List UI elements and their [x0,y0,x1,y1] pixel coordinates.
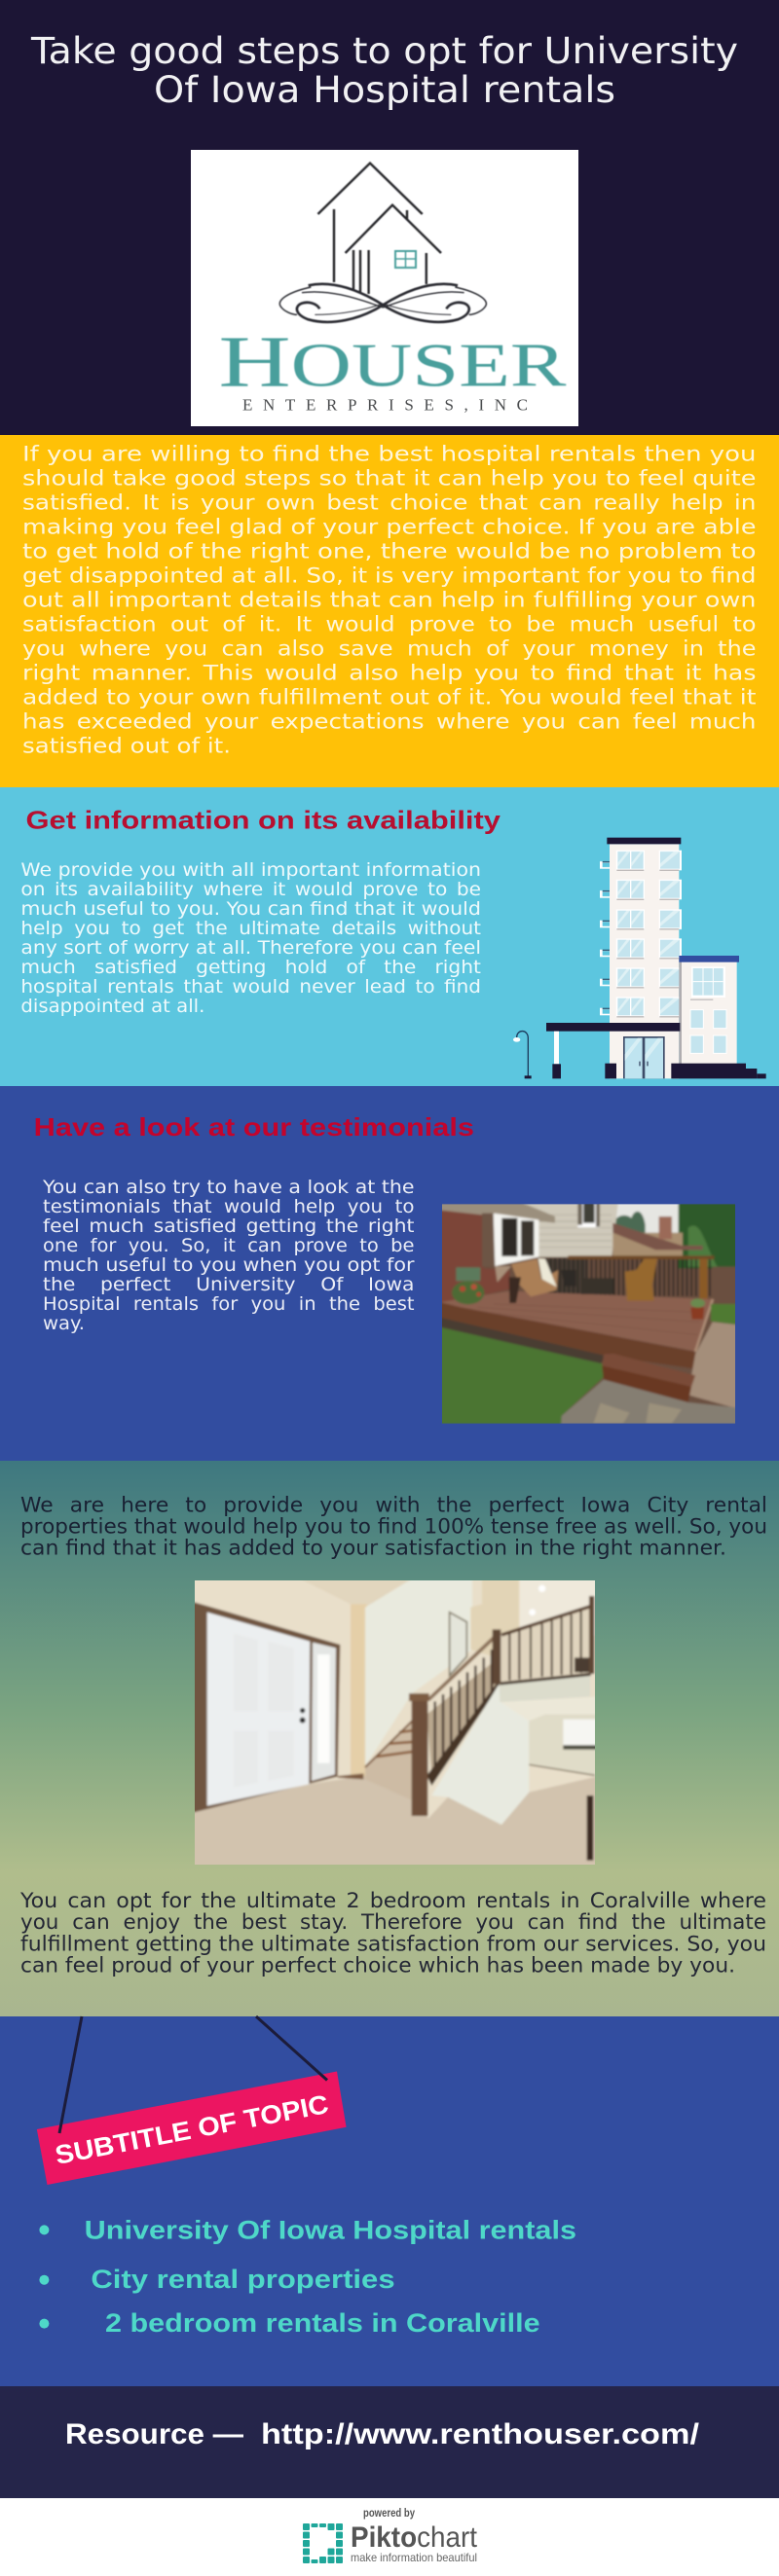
panel: introduction: satisfied. It is your own best choice that can really help in [22,490,756,516]
panel: introduction: should take good steps so that it can help you to feel quite [22,467,756,490]
panel: footer [0,2498,779,2576]
panel: testimonials [0,1086,779,1461]
panel: resource [0,2386,779,2498]
heading: availability: Get information on its availability [25,806,501,835]
text block: Iowa City rental properties: can find that it has added to your satisfaction in the right manner. [20,1536,726,1560]
panel: header [0,0,779,435]
text block: Iowa City rental properties [20,1494,767,1560]
panel: rental properties [0,1461,779,2016]
panel: introduction: you where you can also save much of your money in the [22,636,756,662]
text block: Iowa City rental properties: properties that would help you to find 100% tense free as well. So, you [20,1514,767,1540]
resource link: Resource — [65,2418,243,2450]
title: Of Iowa Hospital rentals [154,69,615,111]
resource link: http://www.renthouser.com/ [261,2418,700,2450]
text block: testimonials: feel much satisfied getting the right [43,1215,415,1237]
text block: availability: We provide you with all important information [20,859,481,881]
text block: availability: much useful to you. You can find that it would [20,898,481,920]
text block: 2 bedroom rentals [19,1889,766,1977]
panel: introduction: get disappointed at all. So, it is very important for you to find [22,564,756,588]
text block: availability: disappointed at all. [20,996,204,1017]
panel: introduction: If you are willing to find the best hospital rentals then you [22,442,756,467]
panel: introduction: to get hold of the right one, there would be no problem to [22,539,756,564]
text block: 2 bedroom rentals: You can opt for the ultimate 2 bedroom rentals in Coralville where [19,1889,766,1913]
powered by: powered by [363,2506,415,2520]
tagline: make information beautiful [351,2551,477,2564]
text block: testimonials: much useful to you when you opt for [43,1254,415,1276]
text block: 2 bedroom rentals: can feel proud of your perfect choice which has been made by you. [20,1954,735,1977]
text block: testimonials: the perfect University Of Iowa [43,1274,414,1295]
heading: testimonials: Have a look at our testimonials [34,1112,474,1142]
photo: wooden deck [438,1200,740,1428]
title [30,30,738,111]
bulleted list: University Of Iowa Hospital rentals [85,2215,576,2244]
text block: 2 bedroom rentals: you can enjoy the best stay. Therefore you can find the ultimate [20,1910,766,1935]
panel: availability [0,787,779,1086]
panel: introduction: satisfaction out of it. It would prove to be much useful to [22,613,756,636]
icon: building illustration [513,838,766,1078]
text block: testimonials: one for you. So, it can prove to be [43,1235,415,1256]
bulleted list: City rental properties [91,2265,395,2294]
panel: introduction [0,435,779,787]
icon: Piktochart logo mark [303,2523,343,2563]
panel: introduction: making you feel glad of your perfect choice. If you are able [22,516,756,539]
panel: introduction: satisfied out of it. [22,734,231,759]
text block: availability [20,859,481,1017]
hanging sign: subtitle of topic: SUBTITLE OF TOPIC [53,2089,331,2170]
panel: subtitle and links [0,2016,779,2386]
text block: 2 bedroom rentals: fulfillment getting the ultimate satisfaction from our services. So, you [20,1932,766,1956]
icon: infinity swirl [279,284,486,322]
icon: house outline [317,163,441,294]
panel: introduction: right manner. This would also help you to find that it has [22,662,757,685]
brand name: H OUSER [218,322,567,403]
text block: availability: hospital rentals that would never lead to find [20,976,481,998]
Piktochart wordmark: Piktochart [351,2522,478,2554]
title: Take good steps to opt for University [30,30,738,72]
logo: Houser Enterprises [191,150,578,426]
text block: testimonials: way. [43,1313,85,1334]
text block: availability: much satisfied getting hold of the right [20,957,481,978]
text block: availability: any sort of worry at all. Therefore you can feel [20,937,481,959]
panel: introduction: added to your own fulfillment out of it. You would feel that it [22,685,756,710]
photo: entry and staircase [190,1577,599,1869]
panel: introduction: out all important details that can help in fulfilling your own [22,588,756,613]
text block: availability: on its availability where it would prove to be [20,879,481,900]
text block: testimonials: testimonials that would help you to [43,1196,415,1217]
bulleted list: 2 bedroom rentals in Coralville [105,2308,540,2338]
text block: testimonials [42,1177,415,1334]
text block: Iowa City rental properties: We are here to provide you with the perfect Iowa City rental [20,1494,767,1518]
text block: testimonials: You can also try to have a look at the [42,1177,415,1198]
hanging sign: subtitle of topic [37,2016,347,2185]
brand subtitle: ENTERPRISES,INC [242,396,528,415]
text block: availability: help you to get the ultimate details without [20,918,481,939]
resource link [65,2418,700,2450]
text block: testimonials: Hospital rentals for you in the best [43,1293,415,1315]
bulleted list [39,2215,576,2338]
panel: introduction: has exceeded your expectations where you can feel much [22,710,756,734]
